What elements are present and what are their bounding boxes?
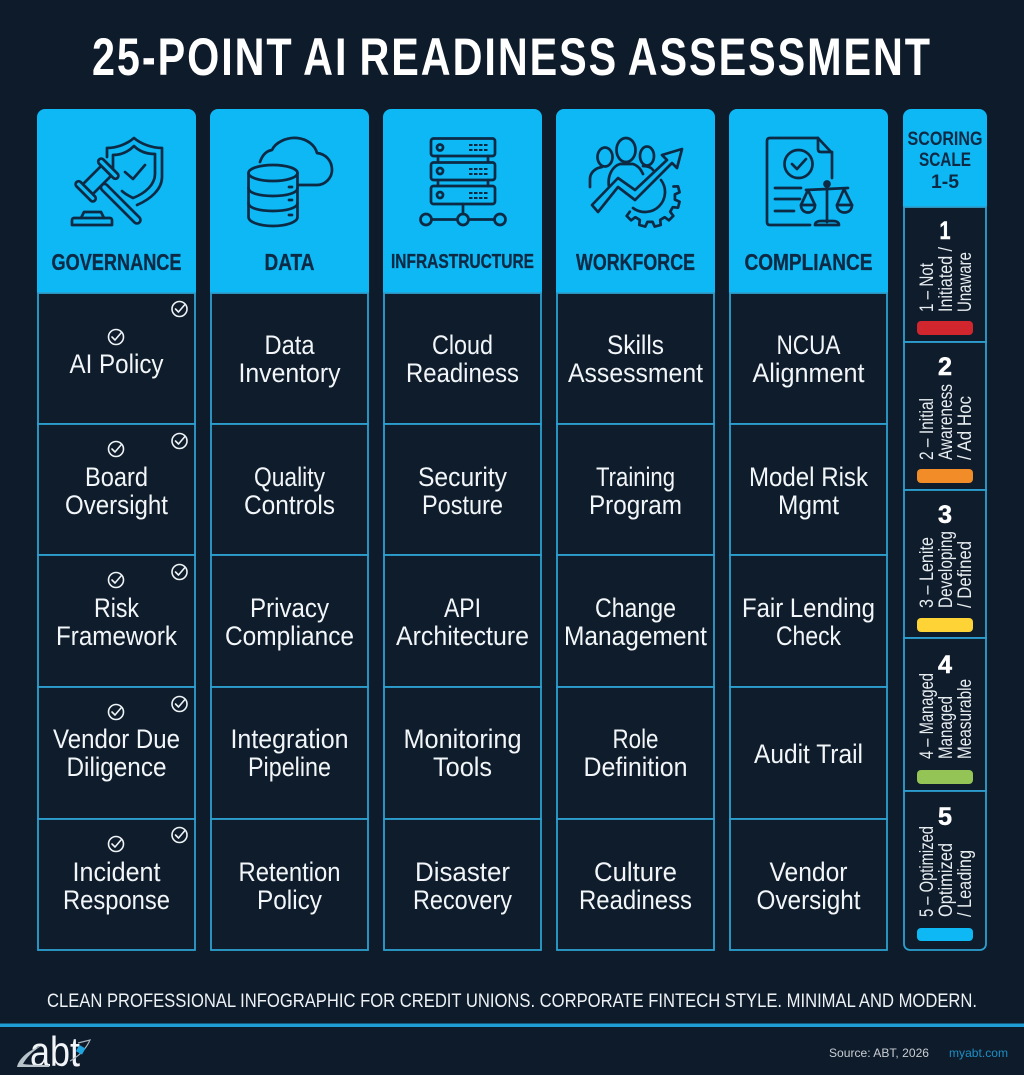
row: Quality Controls: Quality — [254, 462, 325, 492]
compliance label: COMPLIANCE — [744, 249, 872, 275]
row: Security Posture — [384, 424, 541, 555]
level 3: Developing — [936, 531, 957, 608]
row: Vendor Oversight: Oversight — [756, 885, 861, 915]
row: Privacy Compliance — [211, 555, 368, 687]
level 3: 3 – Lenite — [917, 537, 938, 608]
row: Skills Assessment: Assessment — [568, 358, 703, 388]
row: Disaster Recovery — [384, 819, 541, 950]
row: Cloud Readiness: Cloud — [432, 330, 493, 360]
row: NCUA Alignment: NCUA — [776, 330, 840, 360]
row: Fair Lending Check: Check — [776, 621, 841, 651]
row: Monitoring Tools: Monitoring — [404, 724, 522, 754]
panel: infrastructure — [383, 109, 542, 950]
level 2: 2 — [938, 353, 952, 381]
level 4 — [904, 638, 986, 791]
row: Role Definition: Definition — [584, 752, 688, 782]
row: Monitoring Tools — [384, 687, 541, 819]
row: Quality Controls — [211, 424, 368, 555]
icon: document and scales — [767, 138, 852, 225]
row: Board Oversight: Oversight — [65, 490, 168, 520]
level 1: Initiated / — [936, 246, 957, 312]
row: Integration Pipeline: Pipeline — [248, 752, 331, 782]
level 5 — [904, 791, 986, 950]
row: API Architecture: API — [444, 593, 481, 623]
row: Fair Lending Check — [730, 555, 887, 687]
row: Retention Policy: Retention — [238, 857, 340, 887]
level 1: 1 – Not — [917, 262, 938, 312]
row: Vendor Due Diligence: Diligence — [66, 752, 166, 782]
level 5: 5 – Optimized — [917, 826, 938, 917]
level 2: Awareness — [936, 384, 957, 460]
website link: myabt.com — [949, 1046, 1008, 1060]
level 3: / Defined — [955, 541, 976, 608]
level 2 — [904, 342, 986, 490]
scoring scale header: 1-5 — [931, 172, 959, 193]
row: Quality Controls: Controls — [244, 490, 335, 520]
governance label: GOVERNANCE — [52, 249, 182, 275]
row: Integration Pipeline — [211, 687, 368, 819]
row: Model Risk Mgmt — [730, 424, 887, 555]
row: Vendor Due Diligence: Vendor Due — [53, 724, 180, 754]
panel: scoring scale — [903, 109, 987, 950]
panel: data — [210, 109, 369, 950]
row: Retention Policy — [211, 819, 368, 950]
row: Cloud Readiness — [384, 293, 541, 424]
icon: gavel and shield — [72, 138, 162, 236]
row: Board Oversight: Board — [85, 462, 148, 492]
logo: abt: abt — [30, 1028, 80, 1075]
row: AI Policy — [38, 293, 195, 424]
row: Training Program — [557, 424, 714, 555]
row: Skills Assessment — [557, 293, 714, 424]
row: API Architecture: Architecture — [396, 621, 529, 651]
row: AI Policy: AI Policy — [70, 349, 164, 379]
governance header — [37, 109, 196, 293]
level 3: 3 — [938, 501, 952, 529]
row: Change Management: Change — [595, 593, 676, 623]
infrastructure header — [383, 109, 542, 293]
compliance header — [729, 109, 888, 293]
level 2: 2 – Initial — [917, 398, 938, 460]
row: Security Posture: Security — [418, 462, 507, 492]
row: Incident Response: Incident — [72, 857, 161, 887]
level 5: / Leading — [955, 850, 976, 917]
row: Vendor Due Diligence — [38, 687, 195, 819]
level 4: 4 – Managed — [917, 673, 938, 759]
icon: server rack network — [420, 138, 506, 225]
row: Data Inventory: Data — [264, 330, 315, 360]
workforce header — [556, 109, 715, 293]
row: Audit Trail: Audit Trail — [754, 739, 863, 769]
row: Risk Framework: Risk — [94, 593, 139, 623]
data label: DATA — [264, 249, 314, 275]
panel: workforce — [556, 109, 715, 950]
row: Fair Lending Check: Fair Lending — [742, 593, 875, 623]
row: Model Risk Mgmt: Mgmt — [778, 490, 839, 520]
row: Data Inventory: Inventory — [238, 358, 341, 388]
row: NCUA Alignment — [730, 293, 887, 424]
row: Incident Response: Response — [63, 885, 170, 915]
row: NCUA Alignment: Alignment — [752, 358, 865, 388]
data header — [210, 109, 369, 293]
scoring scale header: SCALE — [919, 150, 971, 171]
level 1: Unaware — [955, 252, 976, 312]
row: Cloud Readiness: Readiness — [406, 358, 519, 388]
level 1: 1 — [940, 217, 951, 245]
level 3 — [904, 490, 986, 638]
row: Change Management: Management — [564, 621, 707, 651]
level 5: Optimized — [936, 843, 957, 917]
row: Risk Framework: Framework — [56, 621, 177, 651]
row: Culture Readiness — [557, 819, 714, 950]
row: Training Program: Program — [589, 490, 682, 520]
level 5: 5 — [938, 803, 952, 831]
workforce label: WORKFORCE — [576, 249, 695, 275]
level 4: 4 — [938, 651, 952, 679]
row: Culture Readiness: Culture — [594, 857, 677, 887]
panel: compliance — [729, 109, 888, 950]
panel: governance — [37, 109, 196, 950]
row: Skills Assessment: Skills — [607, 330, 664, 360]
row: Role Definition — [557, 687, 714, 819]
footer rule — [0, 1024, 1024, 1027]
row: Integration Pipeline: Integration — [230, 724, 348, 754]
row: Risk Framework — [38, 555, 195, 687]
row: Vendor Oversight — [730, 819, 887, 950]
source note: Source: ABT, 2026 — [829, 1046, 929, 1060]
row: Board Oversight — [38, 424, 195, 555]
row: Monitoring Tools: Tools — [433, 752, 492, 782]
row: Model Risk Mgmt: Model Risk — [749, 462, 868, 492]
icon: people, growth arrow and gear — [590, 138, 682, 227]
row: Culture Readiness: Readiness — [579, 885, 692, 915]
scoring scale header: SCORING — [908, 129, 982, 150]
level 4: Measurable — [955, 679, 976, 759]
row: Change Management — [557, 555, 714, 687]
row: Incident Response — [38, 819, 195, 950]
row: Privacy Compliance: Privacy — [250, 593, 329, 623]
icon: database and cloud — [248, 138, 332, 226]
row: Privacy Compliance: Compliance — [225, 621, 354, 651]
row: Retention Policy: Policy — [257, 885, 322, 915]
level 2: / Ad Hoc — [955, 396, 976, 460]
row: Security Posture: Posture — [422, 490, 503, 520]
row: Disaster Recovery: Disaster — [415, 857, 510, 887]
row: Data Inventory — [211, 293, 368, 424]
row: Audit Trail — [730, 687, 887, 819]
infrastructure label: INFRASTRUCTURE — [391, 251, 534, 273]
row: Vendor Oversight: Vendor — [770, 857, 848, 887]
row: API Architecture — [384, 555, 541, 687]
level 1 — [904, 207, 986, 342]
scoring scale header — [903, 109, 987, 207]
level 4: Managed — [936, 696, 957, 759]
row: Disaster Recovery: Recovery — [413, 885, 512, 915]
row: Training Program: Training — [596, 462, 675, 492]
row: Role Definition: Role — [612, 724, 658, 754]
